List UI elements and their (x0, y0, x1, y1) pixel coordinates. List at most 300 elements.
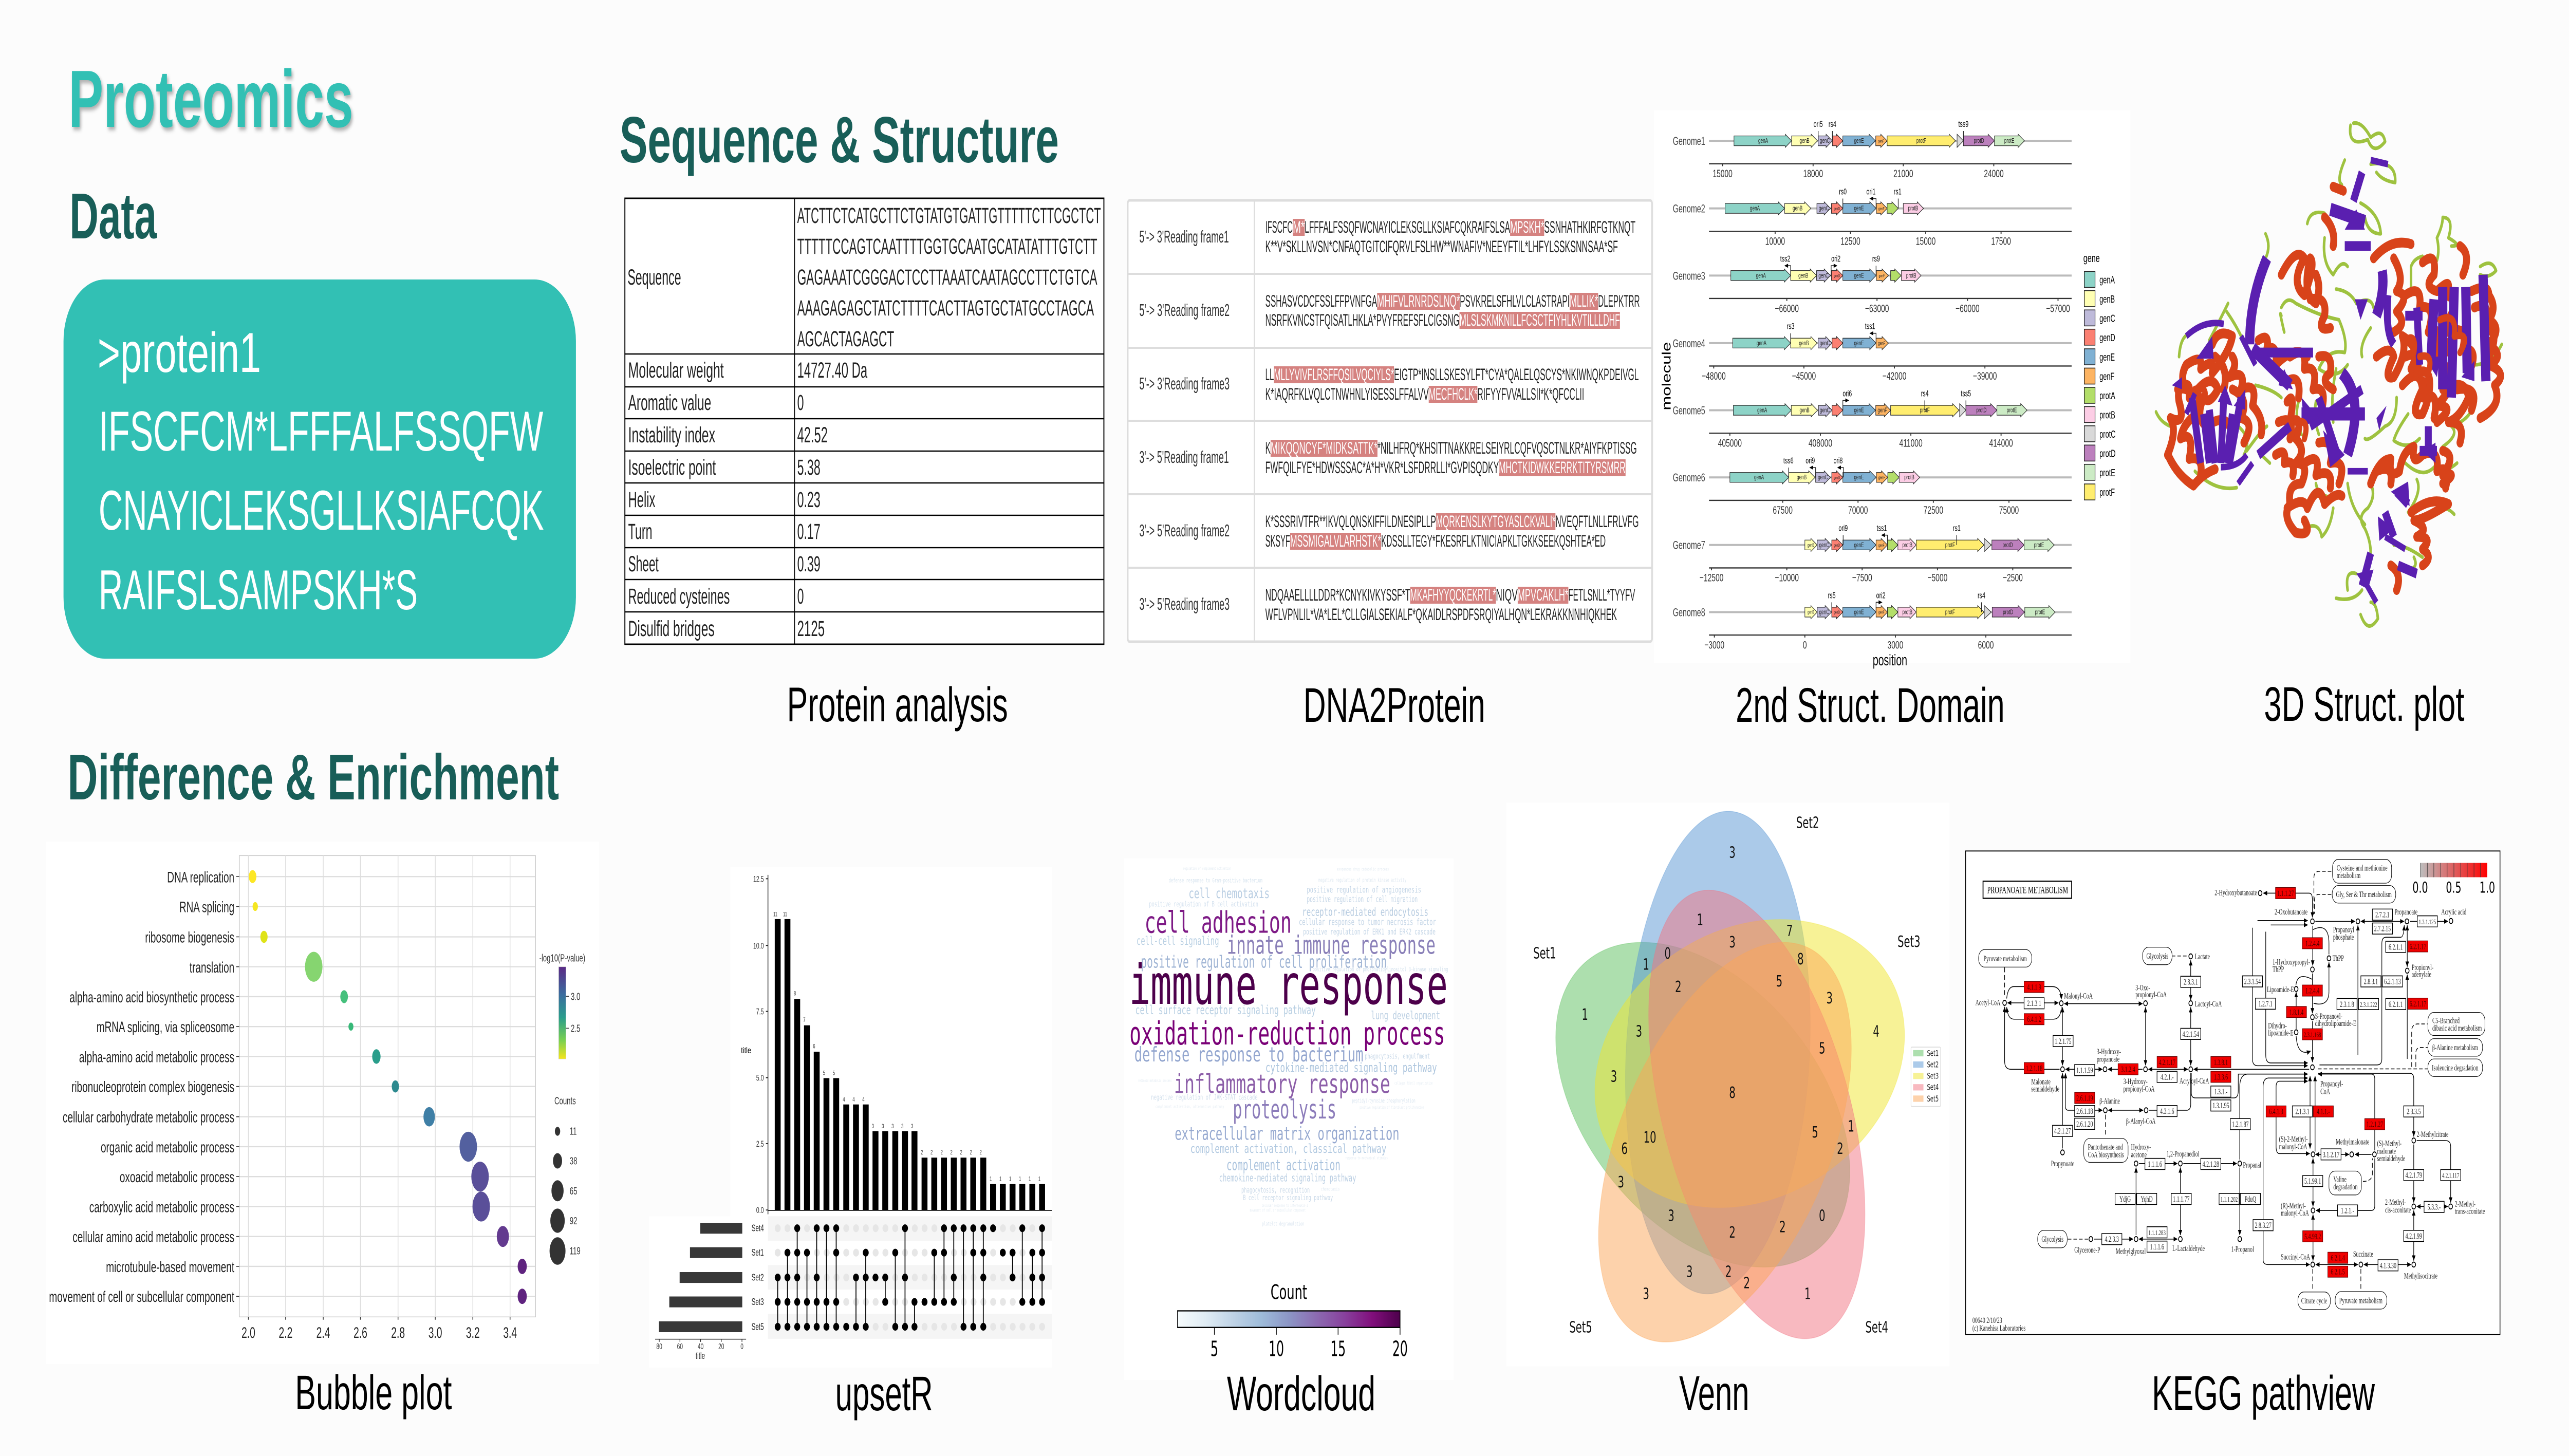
KEGG compound labels: malonyl-CoA (2281, 1208, 2309, 1218)
gene row: Genome5: genB (1800, 407, 1810, 414)
gene row: Genome2: 17500 (1991, 235, 2011, 247)
gene row: Genome3: genB (1798, 272, 1808, 279)
gene row: Genome3: genA (1756, 272, 1766, 279)
panel: DNA2Protein reading frames table: MECFHCLK* (1429, 385, 1478, 403)
panel: DNA2Protein reading frames table: LFFFALFSSQFWCNAYICLEKSGLLKSIAFCQKRAIFSLSA (1305, 218, 1510, 236)
upset intersection bars: 7.5 (756, 1006, 764, 1016)
KEGG enzyme labels (2027, 910, 2459, 1270)
KEGG mapped enzyme labels: 6.4.1.3 (2269, 1107, 2283, 1116)
upset intersection bars: 1 (1038, 1176, 1040, 1183)
panel: protein analysis table: Sheet (628, 551, 659, 576)
gene row: Genome7: protD (2003, 542, 2013, 549)
KEGG compound labels: propanoate (2097, 1054, 2119, 1063)
upset intersection bars: 5.0 (756, 1073, 764, 1082)
KEGG compound labels: malonate (2377, 1146, 2396, 1155)
bubble plot term labels: ribonucleoprotein complex biogenesis (71, 1079, 234, 1096)
KEGG compound labels: Lactoyl-CoA (2195, 999, 2222, 1009)
gene row: Genome7: ori9 (1838, 523, 1848, 533)
legend: gene: genF (2099, 371, 2114, 382)
KEGG enzyme labels: 4.1.3.30 (2380, 1261, 2396, 1270)
Venn counts: 5 (1812, 1124, 1818, 1142)
gene row: Genome7: protE (2034, 542, 2044, 549)
Venn counts: 2 (1725, 1263, 1732, 1281)
panel: protein analysis table: Molecular weight (628, 358, 724, 383)
KEGG map title (1983, 881, 2072, 898)
gene row: Genome1: genB (1800, 137, 1810, 145)
panel: GO term wordcloud: positive regulation of angiogenesis (1307, 885, 1421, 895)
bubble plot axis ticks: 2.0 (241, 1324, 255, 1341)
KEGG compound labels: 2-Oxobutanoate (2275, 907, 2307, 917)
gene row: Genome7: −12500 (1700, 572, 1723, 584)
gene row: Genome5: genA (1757, 407, 1767, 414)
gene row: Genome4: genE (1854, 340, 1864, 347)
KEGG mapped enzyme labels: 1.1.1.27 (2277, 889, 2294, 898)
legend: gene: protE (2099, 467, 2115, 479)
panel: DNA2Protein reading frames table: MKAFHYYQCKEKRTL* (1410, 586, 1496, 604)
KEGG enzyme boxes: mapped red (2024, 888, 2428, 1277)
KEGG linked pathway boxes: Citrate cycle (2301, 1296, 2328, 1305)
KEGG compound labels: Hydroxy- (2131, 1142, 2151, 1151)
gene row: Genome8: Genome8 (1673, 606, 1705, 619)
gene row: Genome1: protE (2004, 137, 2014, 145)
KEGG enzyme labels: 6.2.1.13 (2384, 977, 2401, 986)
wordcloud colour bar: Count: 20 (1392, 1337, 1408, 1361)
upset set size bars (655, 1223, 764, 1361)
bubble plot term labels: microtubule-based movement (106, 1259, 234, 1276)
panel: protein analysis table: 14727.40 Da (797, 358, 868, 383)
gene row: Genome6: genF (1878, 475, 1885, 480)
KEGG enzyme labels: 1.1.1.6 (2148, 1160, 2162, 1169)
bubble plot axis ticks: 3.2 (466, 1324, 480, 1341)
panel: DNA2Protein reading frames table: K*IAQRFKLVQLCTNWHNLYISESSLFFALVV (1265, 385, 1429, 403)
gene row: Genome3: genF (1879, 274, 1885, 278)
gene row: Genome3: −60000 (1956, 302, 1980, 314)
KEGG map footer: 00640 2/10/23 (1972, 1316, 2002, 1325)
gene row: Genome2: genD (1834, 207, 1840, 211)
Venn counts: 2 (1744, 1274, 1750, 1293)
panel: GO term wordcloud: positive regulation of fibroblast proliferation (1360, 1105, 1424, 1110)
gene row: Genome7: −2500 (2003, 572, 2023, 584)
KEGG compound labels: Succinyl-CoA (2281, 1252, 2311, 1261)
panel: DNA2Protein reading frames table: DLEPKTRR (1598, 292, 1640, 310)
heading: Sequence & Structure: Sequence & Structure (620, 103, 1059, 176)
gene row: Genome8: −3000 (1704, 639, 1724, 651)
gene row: Genome4: genA (1757, 340, 1767, 347)
upset membership matrix (768, 1216, 1052, 1339)
KEGG compound labels: Acrylic acid (2441, 907, 2467, 917)
bubble plot term labels: alpha-amino acid biosynthetic process (69, 989, 234, 1006)
panel: DNA2Protein reading frames table: MLLYVIVFLRSFFQSILVQCIYLS* (1274, 365, 1394, 384)
panel: GO term wordcloud: cellular response to tumor necrosis factor (1299, 918, 1436, 928)
Venn set names: Set3 (1897, 933, 1921, 951)
KEGG enzyme labels: 1.2.1.87 (2232, 1119, 2249, 1129)
KEGG compound labels: cis-aconitate (2385, 1205, 2411, 1215)
KEGG mapped enzyme labels: 1.8.1.4 (2289, 1007, 2304, 1017)
KEGG compound labels: (S)-2-Methyl- (2279, 1134, 2307, 1144)
KEGG enzyme labels: 1.3.1.- (2214, 1087, 2227, 1096)
KEGG compound labels: Lactate (2195, 952, 2210, 961)
KEGG pathway lines and arrows (2005, 871, 2451, 1291)
panel: FASTA data box: IFSCFCM*LFFFALFSSQFW (99, 399, 543, 463)
gene row: Genome5: genC (1820, 407, 1830, 414)
panel: DNA2Protein reading frames table: SKSYF (1265, 532, 1290, 550)
upset intersection bars: 8 (794, 991, 796, 997)
gene row: Genome5: rs4 (1921, 388, 1929, 398)
upset set size bars: Set4 (752, 1223, 764, 1234)
KEGG compound labels: trans-aconitate (2455, 1206, 2485, 1216)
bubble plot axis ticks: 2.2 (279, 1324, 292, 1341)
Venn set names: Set2 (1796, 814, 1819, 832)
panel: GO term wordcloud: phagocytosis, recognition (1241, 1186, 1310, 1194)
panel: protein analysis table: GAGAAATCGGGACTCCTTAAATCAATAGCCTTCTGTCA (797, 265, 1097, 290)
upset intersection bars: 6 (813, 1043, 815, 1050)
gene row: Genome2: 12500 (1840, 235, 1860, 247)
panel: GO term wordcloud: proteolysis (1233, 1094, 1336, 1125)
KEGG mapped enzyme labels: 2.3.1.168 (2304, 1031, 2321, 1039)
upset intersection bars: title (741, 1047, 751, 1056)
panel: GO term wordcloud: complement activation, classical pathway (1190, 1142, 1386, 1156)
panel: DNA2Protein reading frames table: PSVKRELSFHLVLCLASTRAPI (1460, 292, 1570, 310)
gene row: Genome4: −48000 (1702, 370, 1726, 382)
KEGG compound labels: β-Alanyl-CoA (2126, 1116, 2156, 1126)
KEGG compound labels: 2-Methyl- (2385, 1198, 2406, 1207)
bubble plot axis ticks: 3.0 (429, 1324, 442, 1341)
legend: counts: 119 (570, 1244, 581, 1257)
gene row: Genome6: protB (1904, 474, 1914, 481)
gene row: Genome7: tss1 (1877, 523, 1887, 533)
panel: DNA2Protein reading frames table: IFSCFC (1265, 218, 1293, 236)
KEGG compound labels: Lipoamide-E (2267, 985, 2294, 994)
bubble plot axis ticks (241, 1324, 517, 1341)
gene row: Genome8: genE (1854, 609, 1864, 616)
panel: protein analysis table: 0 (797, 584, 804, 609)
gene row: Genome8: ori2 (1876, 590, 1886, 600)
KEGG enzyme labels: 5.3.3.- (2428, 1202, 2441, 1211)
panel: DNA2Protein reading frames table: MLSLSKMKNILLFCSCTFIYHLKVTILLLDHF (1460, 311, 1620, 329)
KEGG enzyme labels: 1.3.1.95 (2212, 1101, 2229, 1110)
bubbles (249, 870, 527, 1304)
gene row: Genome8: protB (1903, 609, 1912, 616)
panel: DNA2Protein reading frames table: 3'-> 5'Reading frame1 (1139, 447, 1229, 466)
KEGG linked pathway boxes: C5-Branched (2432, 1016, 2460, 1025)
gene row: Genome1: tss9 (1958, 119, 1968, 129)
upset intersection bars: 4 (862, 1096, 865, 1103)
Venn counts: 6 (1622, 1140, 1628, 1158)
caption: Protein analysis: Protein analysis (787, 677, 1008, 732)
KEGG compound labels: Methylglyoxal (2116, 1246, 2146, 1256)
upset intersection bars: 12.5 (753, 874, 764, 884)
panel: DNA2Protein reading frames table: FETLSNLL*TYYFV (1568, 586, 1635, 604)
panel: GO term wordcloud: defense response to Gram-positive bacterium (1169, 877, 1262, 884)
legend: gene: gene (2083, 252, 2100, 265)
panel: GO term wordcloud: platelet degranulation (1262, 1221, 1304, 1227)
KEGG enzyme labels: 2.1.3.1 (2027, 999, 2041, 1008)
Venn counts: 2 (1779, 1218, 1786, 1237)
gene row: Genome6: genC (1818, 474, 1828, 481)
KEGG compound labels: dihydrolipoamide-E (2315, 1019, 2356, 1028)
panel: DNA2Protein reading frames table: MLLIK* (1570, 292, 1598, 310)
gene row: Genome3: −63000 (1865, 302, 1889, 314)
gene row: Genome8: rs5 (1828, 590, 1836, 600)
gene row: Genome5: 414000 (1989, 437, 2013, 449)
KEGG enzyme labels: 2.8.3.1 (2184, 977, 2198, 986)
Venn counts: 1 (1848, 1117, 1854, 1136)
legend: gene: protC (2099, 428, 2116, 440)
KEGG compound labels: Propynoate (2051, 1159, 2074, 1168)
panel: GO term wordcloud: collagen fibril organization (1394, 1080, 1433, 1086)
KEGG enzyme labels: 4.2.1.28 (2203, 1160, 2219, 1169)
panel: GO term wordcloud: positive regulation of cell proliferation (1141, 953, 1387, 972)
gene row: Genome5: 408000 (1809, 437, 1832, 449)
KEGG enzyme labels: 2.3.3.5 (2407, 1107, 2421, 1116)
panel: protein analysis table: Reduced cysteines (628, 584, 730, 609)
panel: DNA2Protein reading frames table: 3'-> 5'Reading frame2 (1139, 521, 1230, 540)
KEGG map footer (1972, 1316, 2025, 1332)
gene row: Genome7: −10000 (1775, 572, 1799, 584)
KEGG compound labels: 3-Hydroxy- (2097, 1047, 2121, 1056)
gene row: Genome5: genF (1877, 407, 1887, 414)
upset intersection bars: 2 (941, 1150, 943, 1156)
upset intersection bars: 4 (852, 1096, 855, 1103)
3D protein structure ribbon (2156, 123, 2502, 626)
gene row: Genome6: genA (1754, 474, 1764, 481)
gene row: Genome1: Genome1 (1673, 135, 1705, 147)
gene row: Genome8: 0 (1803, 639, 1807, 651)
panel: DNA2Protein reading frames table: 5'-> 3'Reading frame3 (1139, 374, 1230, 393)
gene row: Genome2: protB (1908, 205, 1918, 212)
KEGG mapped enzyme labels (2026, 889, 2426, 1276)
KEGG linked pathway boxes: Cysteine and methionine (2337, 863, 2388, 872)
panel: DNA2Protein reading frames table: FWFQILFYE*HDWSSSAC*A*H*VKR*LSFDRRLLI*GVPISQDKY (1265, 458, 1499, 477)
Venn counts: 3 (1729, 934, 1736, 951)
caption: 3D Struct. plot: 3D Struct. plot (2264, 677, 2465, 731)
Venn counts: 0 (1664, 945, 1671, 963)
KEGG linked pathway boxes: Glycolysis (2041, 1235, 2063, 1244)
upset intersection bars: 4 (843, 1096, 845, 1103)
panel: DNA2Protein reading frames table: WFLVPNLIL*VA*LEL*CLLGIALSEKIALF*QKAIDLRSPDFSRQIYALHQN*LEKRAKKNNHIQKHEK (1265, 605, 1617, 624)
KEGG enzyme labels: 4.3.1.6 (2160, 1107, 2174, 1116)
bubble plot term labels: alpha-amino acid metabolic process (79, 1049, 234, 1066)
upset intersection bars: 1 (990, 1176, 992, 1183)
KEGG mapped enzyme labels: 6.4.1.2 (2027, 1015, 2041, 1024)
panel: GO term wordcloud: exogenous drug catabolic process (1337, 867, 1389, 872)
upset set size bars: 0 (740, 1342, 743, 1351)
KEGG linked pathway boxes: Glycolysis (2146, 951, 2168, 961)
panel: FASTA data box (64, 279, 576, 659)
gene row: Genome4 (1673, 321, 2072, 382)
gene row: Genome2: rs0 (1839, 186, 1847, 196)
Venn counts: 2 (1675, 978, 1682, 996)
KEGG compound labels: Succinate (2353, 1249, 2373, 1258)
panel: GO term wordcloud: negative regulation of protein kinase activity (1318, 877, 1406, 883)
panel: GO term wordcloud: cell chemotaxis (1188, 886, 1270, 902)
KEGG enzyme labels: 2.3.1.8 (2340, 1000, 2354, 1009)
Venn counts: 3 (1668, 1207, 1674, 1225)
KEGG enzyme labels: 1.1.1.202 (2221, 1196, 2238, 1204)
legend: counts: 11 (570, 1125, 576, 1137)
Venn counts: 1 (1643, 956, 1649, 974)
panel: DNA2Protein reading frames table: MQRKENSLKYTGYASLCKVALI* (1436, 512, 1556, 531)
gene row: Genome7: genC (1819, 542, 1829, 549)
KEGG enzyme labels: 5.1.99.1 (2304, 1177, 2321, 1186)
upset intersection bars: 3 (872, 1123, 874, 1130)
upset set size bars: 80 (656, 1342, 662, 1351)
bubble plot term labels: organic acid metabolic process (101, 1139, 234, 1156)
KEGG compound labels: 1-Propanol (2231, 1244, 2254, 1254)
gene row: Genome3: −66000 (1775, 302, 1799, 314)
KEGG mapped enzyme labels: 1.3.3.6 (2214, 1072, 2228, 1081)
legend: counts (550, 1094, 581, 1265)
gene row: Genome6: Genome6 (1673, 471, 1705, 484)
KEGG enzyme labels: 4.2.3.3 (2105, 1235, 2119, 1244)
upset intersection bars: 3 (901, 1123, 904, 1130)
gene row: Genome6: ori9 (1805, 456, 1815, 465)
panel: five-set Venn diagram (1506, 800, 1949, 1409)
KEGG compound labels: L-Lactaldehyde (2172, 1244, 2205, 1253)
panel: GO term wordcloud (1124, 858, 1454, 1380)
KEGG compound labels: 2-Methyl- (2455, 1199, 2475, 1208)
bubble plot term labels: RNA splicing (179, 899, 234, 916)
wordcloud colour bar: Count: 15 (1330, 1337, 1346, 1361)
panel: DNA2Protein reading frames table: MPVCAKLH* (1518, 586, 1569, 604)
KEGG compound labels: (R)-Methyl- (2281, 1201, 2306, 1210)
panel: GO term wordcloud: retinoid metabolic process (1138, 1078, 1172, 1083)
KEGG enzyme labels: 2.8.3.27 (2255, 1221, 2272, 1230)
upset intersection bars: 2 (951, 1150, 953, 1156)
gene row: Genome7: genE (1854, 542, 1864, 549)
heading: Data: Data (69, 180, 157, 252)
KEGG mapped enzyme labels: 4.1.1.9 (2027, 982, 2041, 992)
panel: 2nd structure domain gene arrow plot: molecule (1660, 342, 1673, 410)
legend: gene: genC (2099, 313, 2115, 324)
KEGG linked pathway boxes: dibasic acid metabolism (2432, 1023, 2482, 1033)
caption: Wordcloud: Wordcloud (1227, 1366, 1375, 1421)
panel: GO term wordcloud: innate immune response (1227, 931, 1436, 960)
gene row: Genome5: protF (1920, 407, 1930, 414)
KEGG compound labels: ThPP (2333, 954, 2344, 963)
gene row: Genome6: genE (1854, 474, 1864, 481)
KEGG mapped enzyme labels: 1.2.1.27 (2367, 1119, 2384, 1129)
KEGG mapped enzyme labels: 6.2.1.4 (2331, 1253, 2345, 1262)
KEGG mapped enzyme labels: 2.6.1.19 (2076, 1093, 2093, 1103)
upset intersection bars: 11 (783, 911, 787, 918)
gene row: Genome3: Genome3 (1673, 269, 1705, 282)
panel: protein analysis table: 0.23 (797, 487, 821, 512)
upset set size bars: 40 (698, 1342, 703, 1351)
KEGG compound labels: ThPP (2273, 964, 2284, 974)
caption: Bubble plot: Bubble plot (295, 1365, 452, 1420)
KEGG colour scale: 1.0 (2480, 879, 2495, 897)
caption: Venn: Venn (1679, 1366, 1749, 1420)
bubble plot axis ticks: 3.4 (503, 1324, 517, 1341)
KEGG enzyme labels: 4.2.1.99 (2406, 1231, 2422, 1241)
gene row: Genome8: rs4 (1978, 590, 1985, 600)
gene row: Genome1: 15000 (1712, 167, 1733, 180)
Venn counts: 10 (1644, 1129, 1656, 1147)
KEGG compound labels: lipoamide-E (2268, 1028, 2294, 1037)
gene row: Genome2: genF (1878, 207, 1885, 211)
panel: DNA2Protein reading frames table: MIKQQNCYF*MIDKSATTK* (1271, 439, 1377, 457)
caption: DNA2Protein: DNA2Protein (1304, 678, 1485, 732)
axis title: position: position (1873, 652, 1907, 669)
KEGG mapped enzyme labels: 6.2.1.17 (2410, 942, 2426, 951)
panel: DNA2Protein reading frames table: SSHASVCDCFSSLFFPVNFGA (1265, 292, 1377, 310)
bubble plot axis ticks: 2.6 (353, 1324, 367, 1341)
gene row: Genome2: ori1 (1867, 186, 1876, 196)
Venn counts: 3 (1618, 1173, 1624, 1191)
legend: gene (2083, 252, 2116, 500)
Venn legend: Set5 (1927, 1095, 1939, 1104)
gene row: Genome8: genC (1819, 609, 1829, 616)
gene row: Genome3: genE (1854, 272, 1864, 279)
gene row: Genome7: genF (1878, 544, 1885, 548)
KEGG compound labels: Methylmalonate (2336, 1137, 2369, 1146)
KEGG compound labels: Propanoyl (2333, 925, 2354, 934)
gene row: Genome1: genC (1820, 137, 1830, 145)
gene row: Genome2: genB (1793, 205, 1802, 212)
panel: DNA2Protein reading frames table: NIQV (1496, 586, 1518, 604)
upset intersection bars: 1 (1029, 1176, 1031, 1183)
panel: DNA2Protein reading frames table: MPSKH* (1510, 218, 1544, 236)
KEGG enzyme labels: 6.2.1.1 (2389, 942, 2403, 951)
KEGG linked pathway boxes: β-Alanine metabolism (2432, 1043, 2478, 1052)
gene row: Genome7: genB (1808, 543, 1814, 548)
panel: GO term wordcloud: positive regulation of phosphatidylinositol 3-kinase signaling (1313, 966, 1448, 973)
gene row: Genome6 (1673, 456, 2072, 516)
gene row: Genome3: genC (1818, 272, 1829, 279)
KEGG compound labels: 3-Hydroxy- (2124, 1077, 2148, 1086)
panel: protein analysis table: TTTTTCCAGTCAATTTTGGTGCAATGCATATATTTGTCTT (797, 234, 1097, 259)
panel: protein analysis table: Sequence (627, 265, 681, 290)
KEGG enzyme labels: 1.1.1.77 (2173, 1194, 2190, 1204)
legend: counts: Counts (554, 1094, 576, 1107)
panel: GO term wordcloud: extracellular matrix organization (1175, 1124, 1400, 1144)
bubble plot term labels: cellular amino acid metabolic process (72, 1229, 234, 1246)
gene row: Genome4: genB (1799, 340, 1809, 347)
KEGG enzyme labels: 2.6.1.18 (2076, 1107, 2093, 1116)
upset intersection bars: 2 (921, 1150, 923, 1156)
caption: KEGG pathview: KEGG pathview (2152, 1366, 2375, 1420)
panel: GO term wordcloud: regulation of complement activation (1183, 866, 1231, 871)
KEGG compound labels: 1,2-Propanediol (2167, 1149, 2200, 1158)
gene row: Genome1: 21000 (1893, 167, 1913, 180)
legend: gene: protD (2099, 448, 2116, 459)
KEGG compound labels: Acryloyl-CoA (2180, 1076, 2209, 1086)
panel: GO term wordcloud: chemotaxis (1321, 1186, 1339, 1192)
KEGG compound labels: Malonate (2031, 1077, 2051, 1086)
panel: GO term wordcloud: complement activation (1226, 1158, 1341, 1174)
Venn ellipses (1517, 800, 1924, 1409)
panel: KEGG pathview propanoate metabolism (1966, 851, 2500, 1335)
KEGG mapped enzyme labels: 1.2.4.4 (2305, 986, 2320, 995)
panel: protein analysis table: Aromatic value (628, 390, 711, 415)
KEGG compound labels: Propanoate (2394, 907, 2417, 917)
gene row: Genome5: tss5 (1961, 388, 1971, 398)
caption: 2nd Struct. Domain: 2nd Struct. Domain (1736, 678, 2005, 732)
KEGG enzyme labels: 3.1.2.17 (2323, 1150, 2339, 1159)
KEGG compound labels: CoA (2320, 1087, 2330, 1096)
upset intersection bars: 11 (773, 911, 777, 918)
panel: protein analysis table: Turn (628, 519, 653, 544)
gene row: Genome5: ori6 (1842, 388, 1852, 398)
KEGG compound labels: Methylisocitrate (2404, 1271, 2437, 1280)
wordcloud colour bar: Count (1178, 1280, 1408, 1361)
gene row: Genome7: protB (1903, 542, 1912, 549)
KEGG compound labels: Acetyl-CoA (1976, 998, 2001, 1007)
Venn legend (1911, 1047, 1941, 1107)
gene row: Genome7 (1673, 523, 2072, 584)
bubble plot term labels: ribosome biogenesis (145, 929, 234, 946)
